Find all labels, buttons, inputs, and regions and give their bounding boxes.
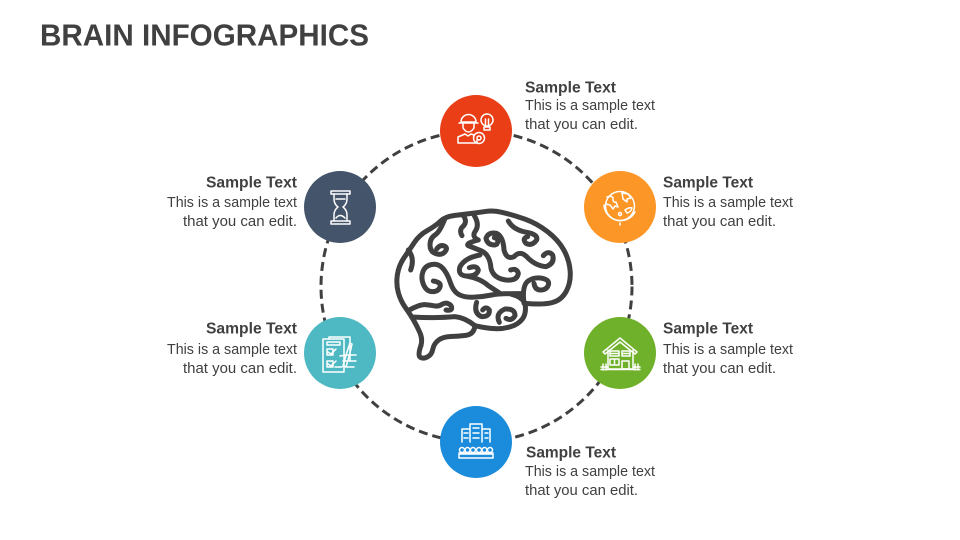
icon: checklist and hand xyxy=(323,337,356,372)
text block: step 2: This is a sample text xyxy=(663,195,793,211)
step 4: blue circle with buildings and people icon xyxy=(440,406,512,478)
text block: step 6: Sample Text xyxy=(206,174,297,192)
text block: step 2 xyxy=(663,174,793,230)
text block: step 5: Sample Text xyxy=(206,320,297,338)
text block: step 6: This is a sample text xyxy=(167,195,297,211)
text block: step 2: that you can edit. xyxy=(663,214,776,230)
dashed ring xyxy=(321,131,632,442)
text block: step 2: Sample Text xyxy=(663,174,753,192)
icon: worker and light bulb xyxy=(458,114,493,144)
text block: step 1: Sample Text xyxy=(525,80,616,96)
text block: step 3: that you can edit. xyxy=(663,361,776,377)
icon: brain xyxy=(397,211,570,358)
text block: step 6: that you can edit. xyxy=(183,214,297,230)
title: BRAIN INFOGRAPHICS xyxy=(40,18,369,52)
text block: step 1 xyxy=(525,80,655,133)
text block: step 3: This is a sample text xyxy=(663,342,793,358)
text block: step 3 xyxy=(663,320,793,377)
text block: step 3: Sample Text xyxy=(663,320,753,338)
step 5: teal circle with checklist icon xyxy=(304,317,376,389)
step 1: red circle with worker icon xyxy=(440,95,512,167)
icon: house xyxy=(601,338,640,370)
step 3: green circle with house icon xyxy=(584,317,656,389)
step 6: navy circle with hourglass icon xyxy=(304,171,376,243)
text block: step 4 xyxy=(525,444,655,499)
text block: step 6 xyxy=(167,174,297,230)
text block: step 1: that you can edit. xyxy=(525,117,638,133)
text block: step 5: This is a sample text xyxy=(167,342,297,358)
text block: step 4: Sample Text xyxy=(526,444,616,462)
text block: step 5 xyxy=(167,320,297,377)
text block: step 4: that you can edit. xyxy=(525,483,638,499)
step 2: orange circle with globe icon xyxy=(584,171,656,243)
icon: buildings and people xyxy=(459,424,493,458)
icon: globe xyxy=(604,192,635,225)
text block: step 4: This is a sample text xyxy=(525,464,655,480)
text block: step 1: This is a sample text xyxy=(525,98,655,114)
text block: step 5: that you can edit. xyxy=(183,361,297,377)
icon: hourglass xyxy=(331,191,350,224)
